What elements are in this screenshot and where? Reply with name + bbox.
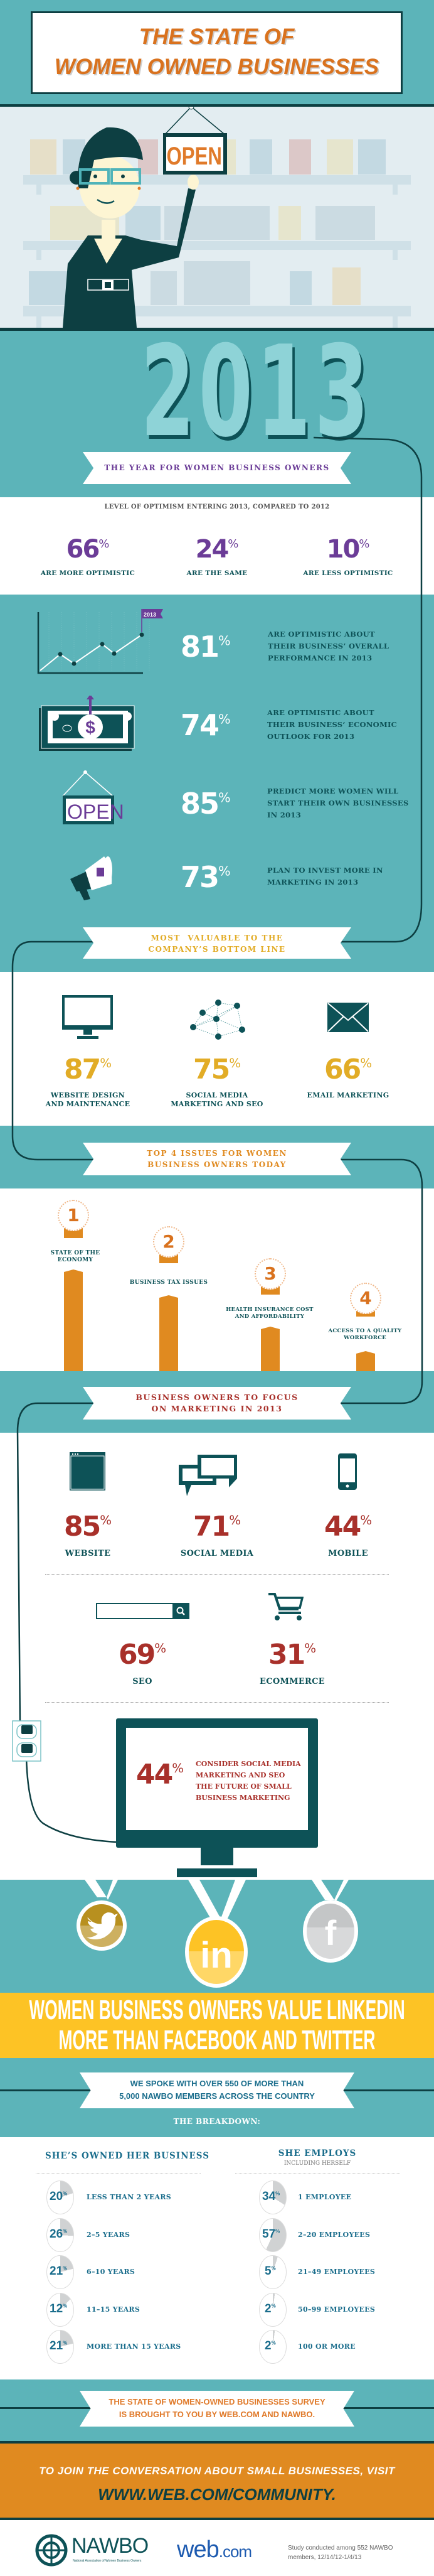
- breakdown: owned her business: 12%: [50, 2302, 67, 2315]
- optimism subtitle: LEVEL OF OPTIMISM ENTERING 2013, COMPARED TO 2012: [104, 504, 330, 510]
- title banner: [31, 11, 403, 94]
- section backgrounds: [0, 0, 434, 104]
- breakdown: owned her business: SHE’S OWNED HER BUSINESS: [45, 2151, 209, 2161]
- ribbon: survey size: WE SPOKE WITH OVER 550 OF MORE THAN: [130, 2079, 304, 2088]
- study note: [288, 2543, 393, 2562]
- breakdown: employees: 50–99 EMPLOYEES: [298, 2305, 375, 2314]
- stat mobile: [324, 1511, 372, 1558]
- stat 66: 66%: [66, 535, 109, 564]
- linkedin medal: in: [200, 1935, 233, 1976]
- breakdown: owned her business: 21%: [50, 2339, 67, 2352]
- text 81: [267, 630, 389, 662]
- icon: phone: [338, 1453, 357, 1490]
- call to action band: TO JOIN THE CONVERSATION ABOUT SMALL BUSINESSES, VISIT: [39, 2465, 395, 2477]
- icon: open sign: [63, 770, 124, 824]
- ribbon: most valuable: [83, 927, 351, 959]
- icon: wall outlet: [12, 1720, 41, 1762]
- text 81: ARE OPTIMISTIC ABOUT: [268, 630, 375, 639]
- text 85: IN 2013: [267, 811, 301, 819]
- stat ecommerce: [260, 1639, 325, 1686]
- issue 3: 3: [264, 1263, 277, 1284]
- stat 24: [186, 535, 247, 577]
- facebook medal: f: [325, 1913, 337, 1953]
- study note: members, 12/14/12-1/4/13: [288, 2554, 361, 2561]
- stat 87: AND MAINTENANCE: [46, 1100, 130, 1108]
- breakdown: owned her business: 21%: [50, 2265, 67, 2278]
- ribbon: most valuable: MOST VALUABLE TO THE: [151, 934, 283, 942]
- text 74: [267, 708, 397, 741]
- linkedin medal: [185, 1916, 248, 1988]
- facebook medal: [303, 1900, 358, 1963]
- headline band: linkedin: WOMEN BUSINESS OWNERS VALUE LINKEDIN: [29, 1995, 405, 2025]
- stat seo: 69%: [119, 1639, 166, 1671]
- 44% number: 44%: [136, 1759, 184, 1791]
- stat website: WEBSITE: [65, 1549, 110, 1558]
- breakdown: employees: SHE EMPLOYS: [278, 2148, 356, 2158]
- ribbon: top 4 issues: [83, 1143, 351, 1175]
- ribbon: year for women: THE YEAR FOR WOMEN BUSINESS OWNERS: [104, 463, 330, 472]
- breakdown: employees: 57%: [262, 2228, 280, 2241]
- stat ecommerce: 31%: [268, 1639, 316, 1671]
- icon: monitor: [62, 995, 113, 1039]
- callout: monitor 44%: [116, 1718, 318, 1877]
- text 85: [267, 787, 409, 819]
- ribbon: marketing focus: ON MARKETING IN 2013: [152, 1404, 282, 1413]
- ribbon: top 4 issues: BUSINESS OWNERS TODAY: [147, 1160, 287, 1169]
- stat 87: 87%: [64, 1054, 112, 1086]
- stat 66 email: [307, 1054, 389, 1099]
- text 73: MARKETING IN 2013: [267, 878, 358, 887]
- issue 4: WORKFORCE: [344, 1335, 386, 1341]
- OPEN sign: [163, 104, 227, 175]
- icon: dollar bill: [39, 696, 134, 751]
- ribbon: sponsors: IS BROUGHT TO YOU BY WEB.COM AND NAWBO.: [119, 2410, 315, 2419]
- title banner: WOMEN OWNED BUSINESSES: [55, 55, 379, 79]
- 44% text: [196, 1760, 301, 1802]
- 44% text: THE FUTURE OF SMALL: [196, 1782, 292, 1791]
- stat 74: 74%: [181, 708, 231, 742]
- icon: open sign: OPEN: [67, 800, 124, 823]
- ribbon: top 4 issues: TOP 4 ISSUES FOR WOMEN: [147, 1149, 287, 1158]
- bar chart: issues: [51, 1200, 402, 1371]
- twitter medal: [77, 1900, 127, 1951]
- text 73: [267, 866, 383, 887]
- breakdown: owned her business: 20%: [50, 2190, 67, 2203]
- issue 3: HEALTH INSURANCE COST: [226, 1307, 314, 1313]
- ribbon: sponsors: THE STATE OF WOMEN-OWNED BUSINESSES SURVEY: [109, 2397, 326, 2406]
- text 74: OUTLOOK FOR 2013: [267, 732, 354, 741]
- stat 10: 10%: [327, 535, 369, 564]
- stat 66 email: 66%: [324, 1054, 372, 1086]
- stat mobile: MOBILE: [328, 1549, 368, 1558]
- stat 87: [45, 1054, 130, 1108]
- stat 75: SOCIAL MEDIA: [186, 1091, 248, 1099]
- icon: dollar bill: $: [85, 718, 95, 737]
- ribbon: marketing focus: BUSINESS OWNERS TO FOCUS: [135, 1393, 299, 1402]
- icon: browser: [70, 1452, 105, 1490]
- stat 66: [40, 535, 135, 577]
- ribbon: survey size: [80, 2072, 354, 2108]
- title banner: THE STATE OF: [139, 24, 294, 49]
- icon: line chart: [38, 609, 163, 674]
- issue 4: ACCESS TO A QUALITY: [328, 1328, 402, 1334]
- icon: megaphone: [70, 856, 112, 900]
- stat 73: 73%: [181, 860, 231, 894]
- stat seo: [119, 1639, 166, 1686]
- breakdown: owned her business: [36, 2151, 209, 2364]
- icon: envelope: [327, 1003, 369, 1032]
- text 85: PREDICT MORE WOMEN WILL: [267, 787, 398, 795]
- stat 10: ARE LESS OPTIMISTIC: [303, 569, 393, 577]
- ribbon: most valuable: COMPANY’S BOTTOM LINE: [148, 945, 286, 954]
- breakdown: employees: 2%: [265, 2339, 276, 2352]
- breakdown: owned her business: 2–5 YEARS: [87, 2231, 130, 2239]
- 2013 marquee: 2013: [140, 319, 373, 465]
- stat 66: ARE MORE OPTIMISTIC: [41, 569, 135, 577]
- shop scene illustration: [0, 107, 434, 328]
- study note: Study conducted among 552 NAWBO: [288, 2545, 393, 2552]
- breakdown: employees: 5%: [265, 2265, 276, 2278]
- breakdown: employees: 2–20 EMPLOYEES: [298, 2231, 370, 2239]
- stat 24: 24%: [196, 535, 238, 564]
- breakdown: owned her business: 26%: [50, 2228, 67, 2241]
- breakdown: owned her business: 6–10 YEARS: [87, 2268, 135, 2276]
- issue 3: [226, 1258, 314, 1371]
- text 74: ARE OPTIMISTIC ABOUT: [267, 708, 374, 717]
- woman: [63, 127, 199, 328]
- icon: cart: [268, 1593, 304, 1620]
- stat mobile: 44%: [324, 1511, 372, 1543]
- stat 10: [303, 535, 393, 577]
- stat 75: [171, 1054, 263, 1108]
- optimism stats: [40, 504, 393, 577]
- text 74: THEIR BUSINESS’ ECONOMIC: [267, 720, 397, 729]
- issue 1: [51, 1200, 100, 1371]
- stat 81: 81%: [181, 630, 231, 664]
- headline band: linkedin: MORE THAN FACEBOOK AND TWITTER: [59, 2025, 375, 2056]
- stat 87: WEBSITE DESIGN: [51, 1091, 125, 1099]
- 44% text: BUSINESS MARKETING: [196, 1794, 290, 1802]
- breakdown: employees: 1 EMPLOYEE: [298, 2193, 351, 2201]
- headline band: linkedin: [0, 1993, 434, 2058]
- call to action band: WWW.WEB.COM/COMMUNITY.: [98, 2485, 336, 2504]
- call to action band: [0, 2441, 434, 2520]
- issue 1: ECONOMY: [58, 1257, 93, 1263]
- logo: web.com: web.com: [177, 2536, 251, 2563]
- stat 66 email: EMAIL MARKETING: [307, 1091, 389, 1099]
- issue 1: STATE OF THE: [51, 1250, 100, 1256]
- medals: [77, 1880, 358, 1988]
- breakdown: employees: 100 OR MORE: [298, 2342, 356, 2351]
- logo: NAWBO: NAWBO: [71, 2534, 148, 2558]
- icon: search bar: [96, 1603, 189, 1619]
- stat 75: MARKETING AND SEO: [171, 1100, 263, 1108]
- issue 2: [130, 1226, 208, 1371]
- breakdown: employees: 21–49 EMPLOYEES: [298, 2268, 375, 2276]
- 44% text: MARKETING AND SEO: [196, 1771, 285, 1779]
- issue 4: 4: [359, 1288, 372, 1308]
- logo: NAWBO: [35, 2534, 148, 2567]
- issue 3: AND AFFORDABILITY: [235, 1313, 304, 1320]
- stat social: 71%: [193, 1511, 241, 1543]
- text 85: START THEIR OWN BUSINESSES: [267, 799, 409, 807]
- breakdown: owned her business: 11–15 YEARS: [87, 2305, 140, 2314]
- breakdown: employees: [235, 2148, 400, 2364]
- stat social: SOCIAL MEDIA: [181, 1549, 253, 1558]
- icon: line chart: 2013: [144, 612, 156, 618]
- breakdown: employees: 2%: [265, 2302, 276, 2315]
- issue 2: BUSINESS TAX ISSUES: [130, 1280, 208, 1286]
- icon: chat bubbles: [179, 1455, 237, 1496]
- ribbon: marketing focus: [83, 1387, 351, 1420]
- ribbon: sponsors: [80, 2391, 354, 2427]
- text 81: THEIR BUSINESS’ OVERALL: [268, 642, 389, 650]
- issue 1: 1: [67, 1205, 80, 1226]
- stat ecommerce: ECOMMERCE: [260, 1677, 325, 1686]
- stat website: [64, 1511, 112, 1558]
- breakdown: owned her business: MORE THAN 15 YEARS: [87, 2342, 181, 2351]
- 44% text: CONSIDER SOCIAL MEDIA: [196, 1760, 301, 1768]
- stat 24: ARE THE SAME: [187, 569, 247, 577]
- stat website: 85%: [64, 1511, 112, 1543]
- stat social: [181, 1511, 253, 1558]
- logo: NAWBO: National Association of Women Business Owners: [73, 2559, 141, 2563]
- text 73: PLAN TO INVEST MORE IN: [267, 866, 383, 875]
- stat 75: 75%: [193, 1054, 241, 1086]
- ribbon: year for women: [83, 452, 351, 484]
- issue 4: [328, 1283, 402, 1371]
- breakdown: owned her business: LESS THAN 2 YEARS: [87, 2193, 171, 2201]
- stat 85: 85%: [181, 787, 231, 821]
- stat seo: SEO: [132, 1677, 152, 1686]
- ribbon: survey size: 5,000 NAWBO MEMBERS ACROSS THE COUNTRY: [119, 2091, 315, 2101]
- breakdown: employees: 34%: [262, 2190, 280, 2203]
- icon: network: [190, 1000, 245, 1040]
- breakdown: employees: INCLUDING HERSELF: [284, 2160, 351, 2167]
- OPEN sign: OPEN: [166, 142, 222, 170]
- issue 2: 2: [162, 1231, 175, 1252]
- breakdown label: THE BREAKDOWN:: [174, 2117, 260, 2126]
- text 81: PERFORMANCE IN 2013: [268, 654, 372, 662]
